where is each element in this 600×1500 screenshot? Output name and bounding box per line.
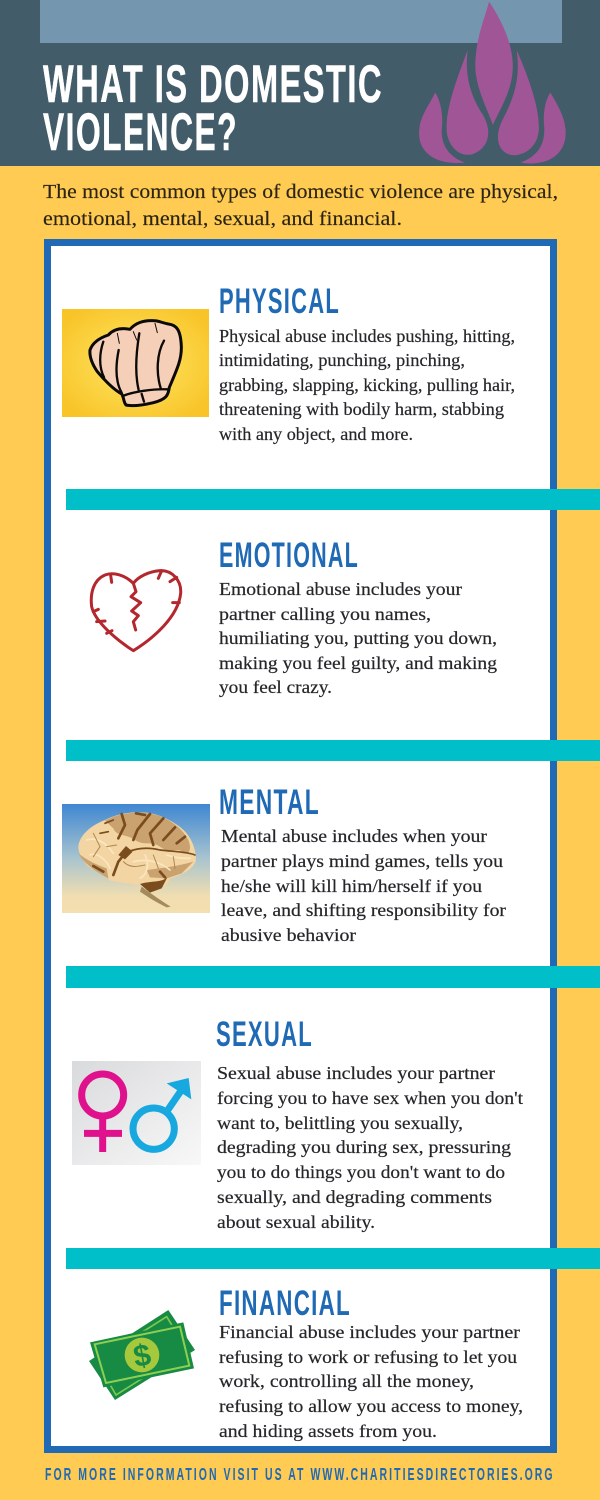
description: Sexual abuse includes your partner <box>217 1063 495 1083</box>
icon: brain <box>62 804 210 913</box>
heading: PHYSICAL <box>219 282 340 321</box>
intro text <box>43 181 558 230</box>
description <box>219 579 497 697</box>
description: partner calling you names, <box>219 604 431 624</box>
icon: money <box>89 1310 195 1400</box>
description <box>219 326 515 444</box>
description: Mental abuse includes when your <box>221 826 487 846</box>
title: WHAT IS DOMESTIC <box>43 55 383 114</box>
description: humiliating you, putting you down, <box>219 628 497 648</box>
description: leave, and shifting responsibility for <box>221 900 506 920</box>
description: work, controlling all the money, <box>219 1371 474 1391</box>
icon: purple flames <box>419 2 566 163</box>
icon: broken heart <box>91 571 181 651</box>
description: about sexual ability. <box>217 1212 375 1232</box>
header band <box>0 0 600 166</box>
description: refusing to allow you access to money, <box>219 1396 523 1416</box>
icon: fist <box>62 309 209 417</box>
intro text: emotional, mental, sexual, and financial. <box>43 208 402 230</box>
description: Physical abuse includes pushing, hitting, <box>219 326 515 346</box>
description <box>221 826 506 945</box>
description: he/she will kill him/herself if you <box>221 876 482 896</box>
section: sexual <box>72 1015 523 1232</box>
description: refusing to work or refusing to let you <box>219 1347 517 1367</box>
teal divider bars <box>66 489 600 1269</box>
description <box>219 1322 523 1441</box>
heading: EMOTIONAL <box>219 536 359 575</box>
heading: MENTAL <box>219 783 320 822</box>
section: financial <box>89 1284 523 1441</box>
section: physical <box>62 282 515 444</box>
description: Emotional abuse includes your <box>219 579 462 599</box>
description: with any object, and more. <box>219 424 413 444</box>
description: you feel crazy. <box>219 677 332 697</box>
description: partner plays mind games, tells you <box>221 851 503 871</box>
title: VIOLENCE? <box>43 103 238 162</box>
intro text: The most common types of domestic violence are physical, <box>43 181 558 203</box>
icon: gender symbols <box>72 1061 201 1165</box>
title <box>43 55 383 162</box>
main content panel <box>48 242 554 1450</box>
top accent panel <box>40 0 562 43</box>
description: you to do things you don't want to do <box>217 1162 505 1182</box>
description: forcing you to have sex when you don't <box>217 1088 523 1108</box>
description: and hiding assets from you. <box>219 1421 437 1441</box>
description: making you feel guilty, and making <box>219 653 497 673</box>
section: mental <box>62 783 506 945</box>
icon: money: $ <box>131 1338 154 1374</box>
description: Financial abuse includes your partner <box>219 1322 520 1342</box>
description: degrading you during sex, pressuring <box>217 1137 511 1157</box>
description <box>217 1063 523 1232</box>
heading: SEXUAL <box>216 1015 313 1054</box>
description: grabbing, slapping, kicking, pulling hair, <box>219 375 515 395</box>
section: emotional <box>91 536 497 697</box>
description: want to, belittling you sexually, <box>217 1113 463 1133</box>
description: threatening with bodily harm, stabbing <box>219 399 504 419</box>
description: intimidating, punching, pinching, <box>219 350 465 370</box>
heading: FINANCIAL <box>219 1284 351 1323</box>
description: abusive behavior <box>221 925 356 945</box>
description: sexually, and degrading comments <box>217 1187 492 1207</box>
footer: FOR MORE INFORMATION VISIT US AT WWW.CHARITIESDIRECTORIES.ORG <box>45 1465 555 1485</box>
